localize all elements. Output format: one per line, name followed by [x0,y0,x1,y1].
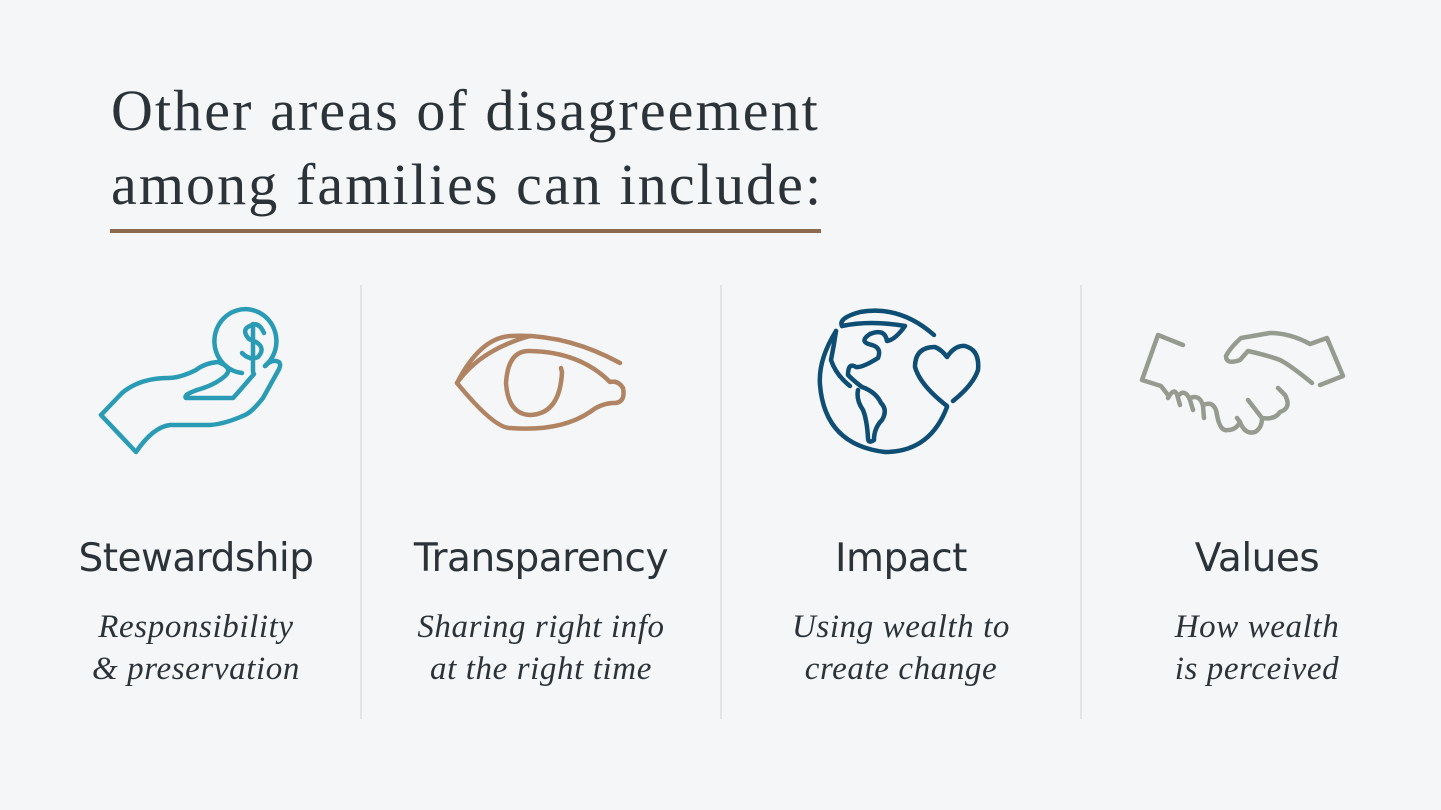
column: Stewardship: Responsibility [98,609,294,645]
icon: globe with heart [820,311,978,452]
title underline [110,229,821,233]
title [111,78,823,217]
column: Impact: Using wealth to [792,609,1010,645]
column: Values: How wealth [1175,609,1339,645]
column: Impact: Impact [835,536,967,581]
icon: hand with coin [101,309,280,452]
column: Stewardship [78,536,314,687]
title: Other areas of disagreement [111,78,820,143]
icon: eye [457,336,624,429]
column: Transparency [414,536,668,687]
column: Impact [792,536,1010,687]
column: Transparency: Sharing right info [417,609,665,645]
column: Stewardship: & preservation [92,651,300,687]
column: Transparency: at the right time [430,651,652,687]
column: Impact: create change [805,651,997,687]
icon: handshake [1142,333,1343,433]
column: Values: Values [1195,536,1319,581]
column: Values: is perceived [1175,651,1339,687]
column: Stewardship: Stewardship [78,536,314,581]
title: among families can include: [111,152,823,217]
column: Transparency: Transparency [414,536,668,581]
column: Values [1174,536,1339,687]
